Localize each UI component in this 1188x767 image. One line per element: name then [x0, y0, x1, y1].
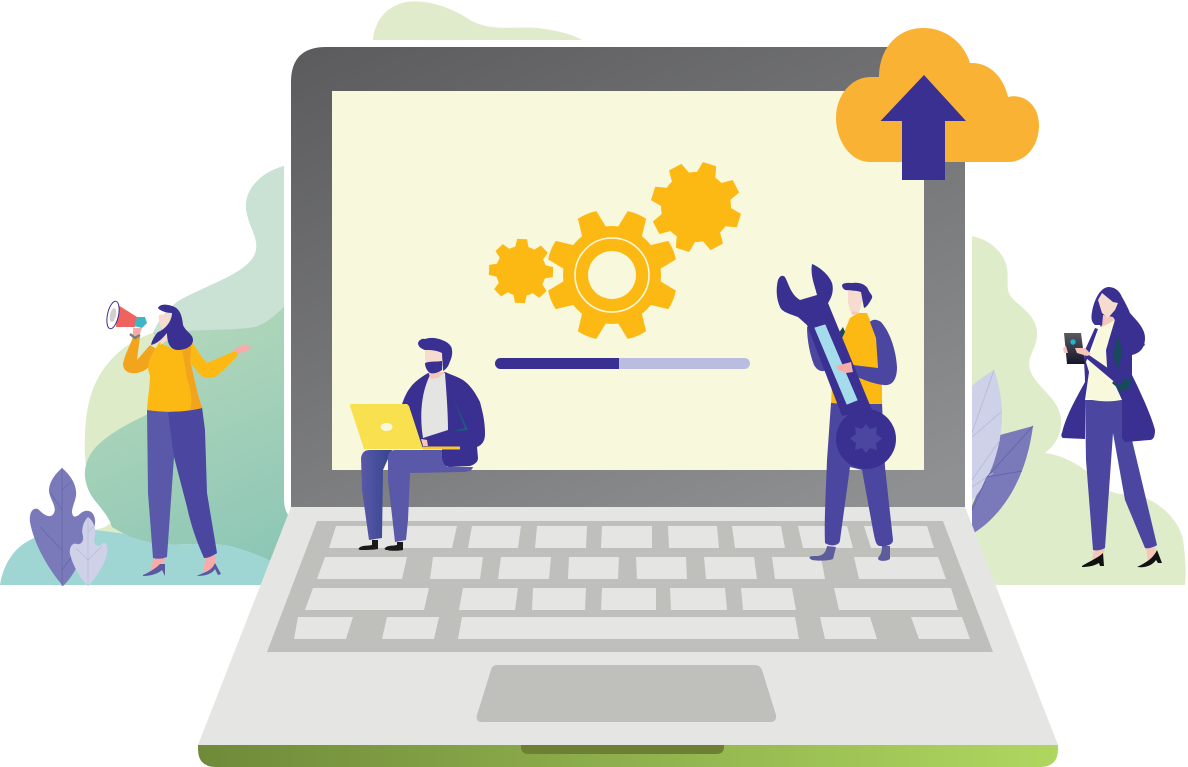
keyboard well	[267, 521, 993, 652]
wrench	[777, 264, 896, 469]
hands	[1063, 346, 1091, 356]
cloud shape	[836, 28, 1039, 162]
right green blob	[972, 236, 1186, 585]
dark leaf right	[966, 426, 1033, 533]
laptop	[198, 47, 1058, 767]
icon: small gear	[489, 239, 553, 303]
neck and face	[159, 313, 172, 345]
trousers	[825, 403, 893, 546]
background: right foliage	[966, 236, 1186, 585]
upload arrow	[880, 75, 966, 180]
hand	[421, 439, 428, 446]
hair and beard	[418, 338, 452, 373]
left arm sleeve	[123, 337, 158, 373]
jacket lining	[1112, 335, 1132, 392]
plant: large left leaf	[30, 468, 95, 586]
back leg	[361, 450, 392, 540]
jacket fold	[448, 398, 468, 433]
collar lining	[838, 327, 845, 342]
person: woman with megaphone	[105, 300, 251, 576]
right trouser leg	[168, 407, 217, 558]
laptop lid bezel	[291, 47, 965, 507]
background blob: top green	[373, 1, 582, 40]
teal ground	[0, 528, 270, 585]
face	[425, 349, 443, 368]
hair	[1091, 287, 1145, 355]
feet	[809, 546, 890, 561]
keyboard keys	[294, 526, 970, 639]
ankles	[150, 556, 216, 572]
right arm sleeve	[186, 342, 238, 378]
right hand	[233, 345, 251, 353]
person: woman with tablet	[1061, 287, 1162, 567]
hair	[151, 305, 193, 350]
icon: upper right gear	[650, 161, 742, 253]
left trouser leg	[147, 410, 174, 559]
blouse	[1086, 320, 1121, 401]
forearm	[427, 430, 478, 448]
t-shirt	[421, 373, 448, 438]
hair	[842, 283, 872, 308]
front leg	[388, 450, 473, 542]
vest	[831, 313, 882, 404]
shoes	[359, 540, 403, 551]
light green blob	[84, 333, 165, 534]
trousers	[1085, 400, 1157, 550]
progress bar	[495, 358, 750, 369]
torso	[147, 342, 202, 412]
hand on wrench	[836, 362, 853, 373]
megaphone	[105, 300, 147, 338]
laptop front edge	[198, 745, 1058, 767]
shoes	[1082, 550, 1162, 567]
right sleeve	[852, 320, 897, 385]
neck	[1102, 315, 1115, 327]
laptop base deck	[198, 507, 1058, 745]
ankles	[1092, 548, 1156, 562]
neck	[428, 372, 445, 379]
gradient green blob	[85, 166, 290, 572]
neck	[851, 307, 860, 315]
background: left foliage	[0, 166, 290, 585]
icon: large gear	[546, 209, 678, 341]
person: man with wrench	[777, 264, 897, 561]
face	[1098, 293, 1118, 318]
laptop touchpad	[477, 665, 776, 722]
heels	[143, 563, 221, 576]
jacket right panel	[1106, 320, 1155, 442]
plant: small left leaf	[70, 517, 107, 586]
forearm	[1086, 355, 1125, 385]
icon: upload cloud	[836, 28, 1039, 180]
laptop	[350, 404, 423, 449]
pale overlay blob	[153, 166, 286, 333]
laptop hinge notch	[521, 745, 724, 754]
jacket	[402, 372, 485, 467]
person: seated man with laptop	[350, 338, 485, 551]
arm behind wrench	[807, 327, 830, 371]
pale leaf right	[970, 370, 1002, 502]
laptop screen	[332, 91, 924, 470]
jacket left panel	[1061, 328, 1098, 439]
tablet	[1064, 333, 1085, 364]
face	[848, 290, 863, 312]
